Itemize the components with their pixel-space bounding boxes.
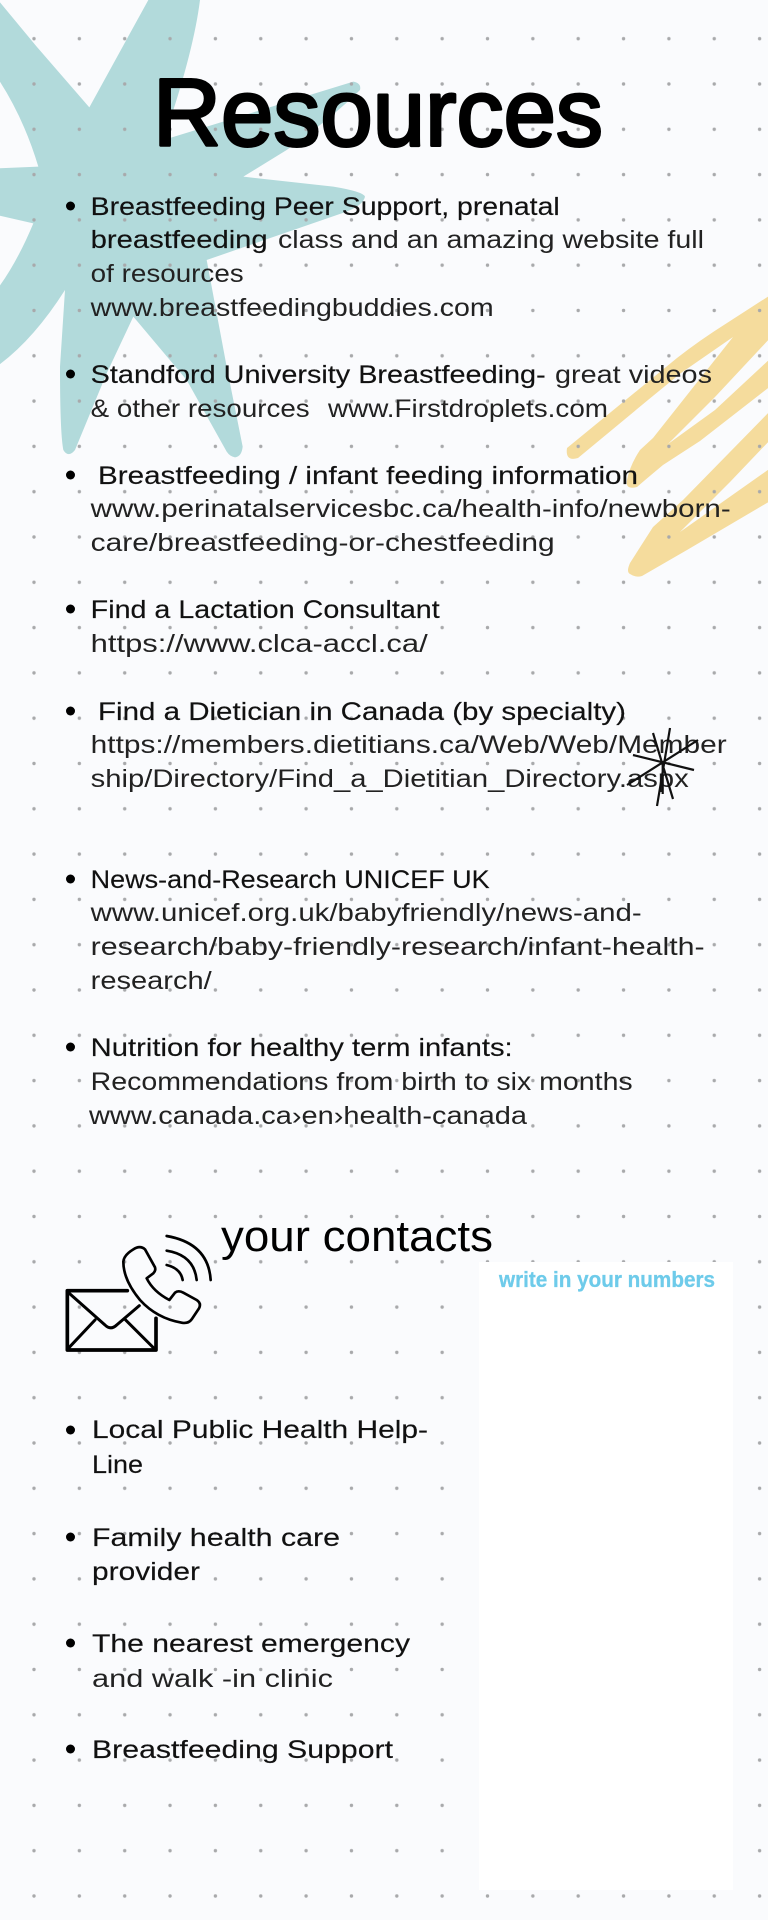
resource: breastfeeding buddies: class and an amazing website full	[278, 226, 704, 254]
contact: family provider: Family health care	[92, 1524, 340, 1552]
icon: black sparkle	[627, 728, 698, 806]
resource: nutrition: www.canada.ca›en›health-canada	[88, 1102, 527, 1130]
resource: Standford University: & other resources	[91, 395, 310, 423]
contact: emergency	[66, 1630, 411, 1693]
resource: dietician: https://members.dietitians.ca/Web/Web/Member	[91, 731, 727, 759]
contact: emergency: and walk -in clinic	[92, 1665, 333, 1693]
contact list	[66, 1416, 428, 1764]
contact: public health line	[66, 1416, 428, 1479]
resource: UNICEF UK: research/	[91, 967, 212, 995]
contact: public health line: Local Public Health Help-	[92, 1416, 428, 1444]
contact: breastfeeding support: Breastfeeding Support	[92, 1736, 393, 1764]
resource: nutrition: Recommendations from birth to six months	[91, 1068, 633, 1096]
resource: UNICEF UK: News-and-Research UNICEF UK	[91, 866, 490, 894]
resource: dietician: ship/Directory/Find_a_Dietitian_Directory.aspx	[91, 765, 689, 793]
resource: Standford University	[66, 361, 712, 423]
resource: Standford University: www.Firstdroplets.com	[327, 395, 608, 423]
heading: your contacts: your contacts	[221, 1212, 493, 1261]
contact: family provider: provider	[92, 1558, 200, 1586]
resource: perinatal services BC: care/breastfeeding-or-chestfeeding	[91, 529, 555, 557]
resource list	[66, 193, 731, 1130]
resource: Standford University: great videos	[555, 361, 712, 389]
icon: envelope and phone	[67, 1236, 211, 1350]
resource: Standford University: Standford University Breastfeeding-	[91, 361, 546, 389]
label: write in your numbers: write in your numbers	[498, 1267, 715, 1292]
resource: nutrition: Nutrition for healthy term infants:	[91, 1034, 513, 1062]
resource: perinatal services BC	[66, 462, 731, 557]
resource: perinatal services BC: Breastfeeding / infant feeding information	[98, 462, 638, 490]
resource: dietician: Find a Dietician in Canada (by specialty)	[98, 698, 626, 726]
resource: breastfeeding buddies: breastfeeding	[91, 226, 268, 254]
decoration: blue star	[0, 0, 365, 457]
contact: public health line: Line	[92, 1451, 143, 1479]
resource: lactation consultant: https://www.clca-accl.ca/	[91, 630, 428, 658]
white notes box	[479, 1262, 733, 1890]
resource: breastfeeding buddies	[66, 193, 704, 322]
contact: family provider	[66, 1524, 340, 1586]
resource: UNICEF UK	[66, 866, 705, 995]
resource: lactation consultant	[66, 596, 440, 658]
resource: breastfeeding buddies: www.breastfeedingbuddies.com	[90, 294, 494, 322]
resource: lactation consultant: Find a Lactation Consultant	[91, 596, 440, 624]
resource: perinatal services BC: www.perinatalservicesbc.ca/health-info/newborn-	[90, 495, 731, 523]
resource: UNICEF UK: www.unicef.org.uk/babyfriendly/news-and-	[90, 899, 642, 927]
decoration: yellow scribble	[567, 294, 768, 577]
resource: UNICEF UK: research/baby-friendly-research/infant-health-	[91, 933, 705, 961]
resource: nutrition	[66, 1034, 633, 1130]
resource: dietician	[66, 698, 727, 793]
title: Resources	[153, 60, 603, 166]
resource: breastfeeding buddies: Breastfeeding Peer Support, prenatal	[91, 193, 560, 221]
resource: breastfeeding buddies: of resources	[91, 260, 244, 288]
contact: emergency: The nearest emergency	[92, 1630, 411, 1658]
